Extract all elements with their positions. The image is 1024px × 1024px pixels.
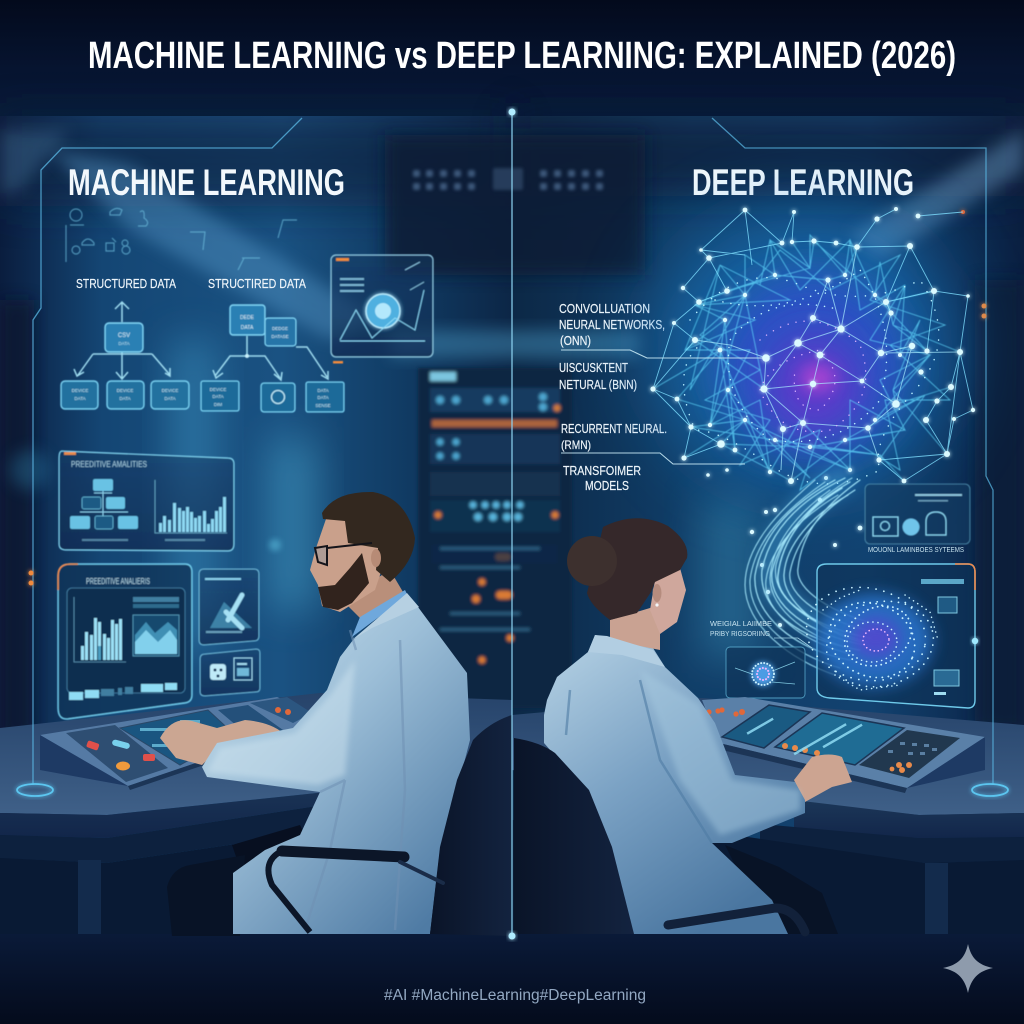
caption: neural primary regions: PRIBY RIGSORIING <box>710 631 770 638</box>
control strip <box>69 683 177 700</box>
trousers <box>725 845 838 934</box>
hair <box>587 518 687 620</box>
caption: neural systems: MOUONL LAMINBOES SYTEEMS <box>868 547 964 554</box>
heading: machine learning: MACHINE LEARNING <box>68 162 345 203</box>
neck <box>610 605 660 650</box>
left desk <box>0 693 512 936</box>
panel: top analytics <box>331 255 433 364</box>
ear <box>371 549 381 567</box>
console buttons <box>706 707 937 773</box>
panel: predictive analytics upper <box>59 451 234 551</box>
hair <box>322 492 415 582</box>
output labels: DATA <box>317 395 329 400</box>
label: recurrent: RECURRENT NEURAL. <box>561 422 667 436</box>
hud frame: right <box>712 118 993 785</box>
coat shadow folds <box>305 630 405 930</box>
output labels: DEVICE <box>210 387 226 392</box>
label: uiscuskent: UISCUSKTENT <box>559 361 628 375</box>
panel: mini cluster <box>726 647 805 698</box>
neck <box>342 570 403 620</box>
bar chart <box>81 618 122 660</box>
label leader lines <box>561 350 766 464</box>
data cube secondary: DATASE <box>271 334 289 339</box>
bar chart <box>159 497 226 532</box>
node labels <box>72 388 178 401</box>
caption: neural primary regions: WEIGIAL LAIIMBE <box>710 621 772 628</box>
caption leader line <box>774 638 812 648</box>
coat folds <box>566 680 712 843</box>
deep learning labels <box>559 302 667 493</box>
hand <box>794 754 852 802</box>
node: csv box: DATA <box>118 341 130 346</box>
output boxes <box>201 381 344 412</box>
shirt collar <box>352 590 408 637</box>
label: structured data right: STRUCTIRED DATA <box>208 276 306 291</box>
bottom band <box>0 934 1024 1024</box>
label: cnn: (ONN) <box>560 334 591 348</box>
heading: deep learning: DEEP LEARNING <box>692 162 914 203</box>
collar <box>588 635 665 667</box>
neural network cloud glow <box>655 215 955 485</box>
data cube secondary: DEDGE <box>272 326 288 331</box>
right desk <box>512 698 1024 936</box>
node labels: DEVICE <box>162 388 178 393</box>
small data icons <box>66 208 297 270</box>
hud ring: right <box>972 784 1008 796</box>
lab coat <box>544 635 805 934</box>
label: rnn: (RMN) <box>561 438 591 452</box>
label: transformer: TRANSFOIMER <box>563 464 641 478</box>
panel: cluster display <box>817 564 978 708</box>
node labels: DEVICE <box>117 388 133 393</box>
center divider line <box>508 108 516 940</box>
output labels <box>210 387 331 408</box>
node labels: DEVICE <box>72 388 88 393</box>
console screen 2 <box>218 705 283 737</box>
glasses <box>315 543 372 565</box>
panel: predictive analytics lower <box>58 564 192 719</box>
scene background: deep learning side <box>512 116 1024 936</box>
neural network inner mesh <box>695 247 960 481</box>
output labels: DATA <box>317 388 329 393</box>
console controls <box>66 707 291 782</box>
panel: neural systems <box>865 484 970 544</box>
data cube <box>230 305 265 335</box>
ear <box>652 584 662 602</box>
hands <box>160 720 283 765</box>
console screen <box>722 705 810 748</box>
scene background: machine learning side <box>0 116 512 936</box>
label: models: MODELS <box>585 479 629 493</box>
face <box>650 568 686 634</box>
right console <box>702 697 985 793</box>
neural network sparkle dust <box>684 270 939 484</box>
node labels: DATA <box>119 396 131 401</box>
node: csv box <box>105 323 143 352</box>
node labels: DATA <box>74 396 86 401</box>
coat collar <box>352 593 419 640</box>
label: structured data left: STRUCTURED DATA <box>76 276 176 291</box>
hud frame: left <box>33 118 302 785</box>
data cube: DEDE <box>240 315 255 321</box>
node labels: DATA <box>164 396 176 401</box>
panel title: PREEDITIVE AMALITIES <box>71 460 147 469</box>
server rack <box>418 368 572 708</box>
output labels: SENSE <box>315 403 331 408</box>
sleeve highlight <box>207 660 355 785</box>
neural network outer edges <box>653 209 973 481</box>
chair left <box>268 715 512 936</box>
node: csv box: CSV <box>118 333 130 339</box>
search icon <box>272 390 284 404</box>
person: deep learning scientist <box>514 518 852 934</box>
neural network fine mesh <box>653 235 960 490</box>
label: neural bnn: NETURAL (BNN) <box>559 378 637 392</box>
data cube secondary <box>265 318 296 346</box>
label: neural networks: NEURAL NETWORKS, <box>559 318 665 332</box>
neural network nodes <box>650 207 975 627</box>
face <box>310 519 385 612</box>
beard <box>318 553 369 610</box>
node: bottom boxes <box>61 381 189 409</box>
area chart <box>133 615 179 656</box>
hashtags: #AI #MachineLearning#DeepLearning <box>384 987 646 1004</box>
trousers <box>167 855 245 936</box>
server room ceiling <box>385 135 645 358</box>
panel title: PREEDITIVE ANALIERIS <box>86 577 150 586</box>
earring <box>655 603 659 607</box>
panel: chip icon <box>200 649 260 696</box>
background: top title band <box>0 0 1024 116</box>
label: convolution: CONVOLLUATION <box>559 302 650 316</box>
output labels: DIM <box>214 402 222 407</box>
lab coat <box>202 594 470 934</box>
chair right <box>514 738 805 934</box>
flow diagram left <box>61 302 189 409</box>
console screen 3 <box>250 697 312 723</box>
left console <box>40 697 313 790</box>
particle cluster <box>798 577 943 698</box>
side indicator lights <box>28 210 986 586</box>
keypad <box>859 730 960 778</box>
panel: link icon <box>199 569 259 645</box>
org chart <box>70 479 138 529</box>
console screen <box>120 710 235 765</box>
hud ring: left <box>17 784 53 796</box>
sleeve highlight <box>640 670 800 835</box>
console screen 2 <box>775 713 904 765</box>
caption: neural primary regions <box>710 621 772 638</box>
person: machine learning scientist <box>160 492 512 936</box>
hair bun <box>567 536 617 586</box>
dark shape under desk <box>232 825 312 868</box>
signal stream <box>745 478 880 675</box>
output labels: DATA <box>212 394 224 399</box>
flow diagram right <box>201 305 344 412</box>
data cube: DATA <box>241 325 254 331</box>
icon: sparkle star <box>943 944 993 993</box>
